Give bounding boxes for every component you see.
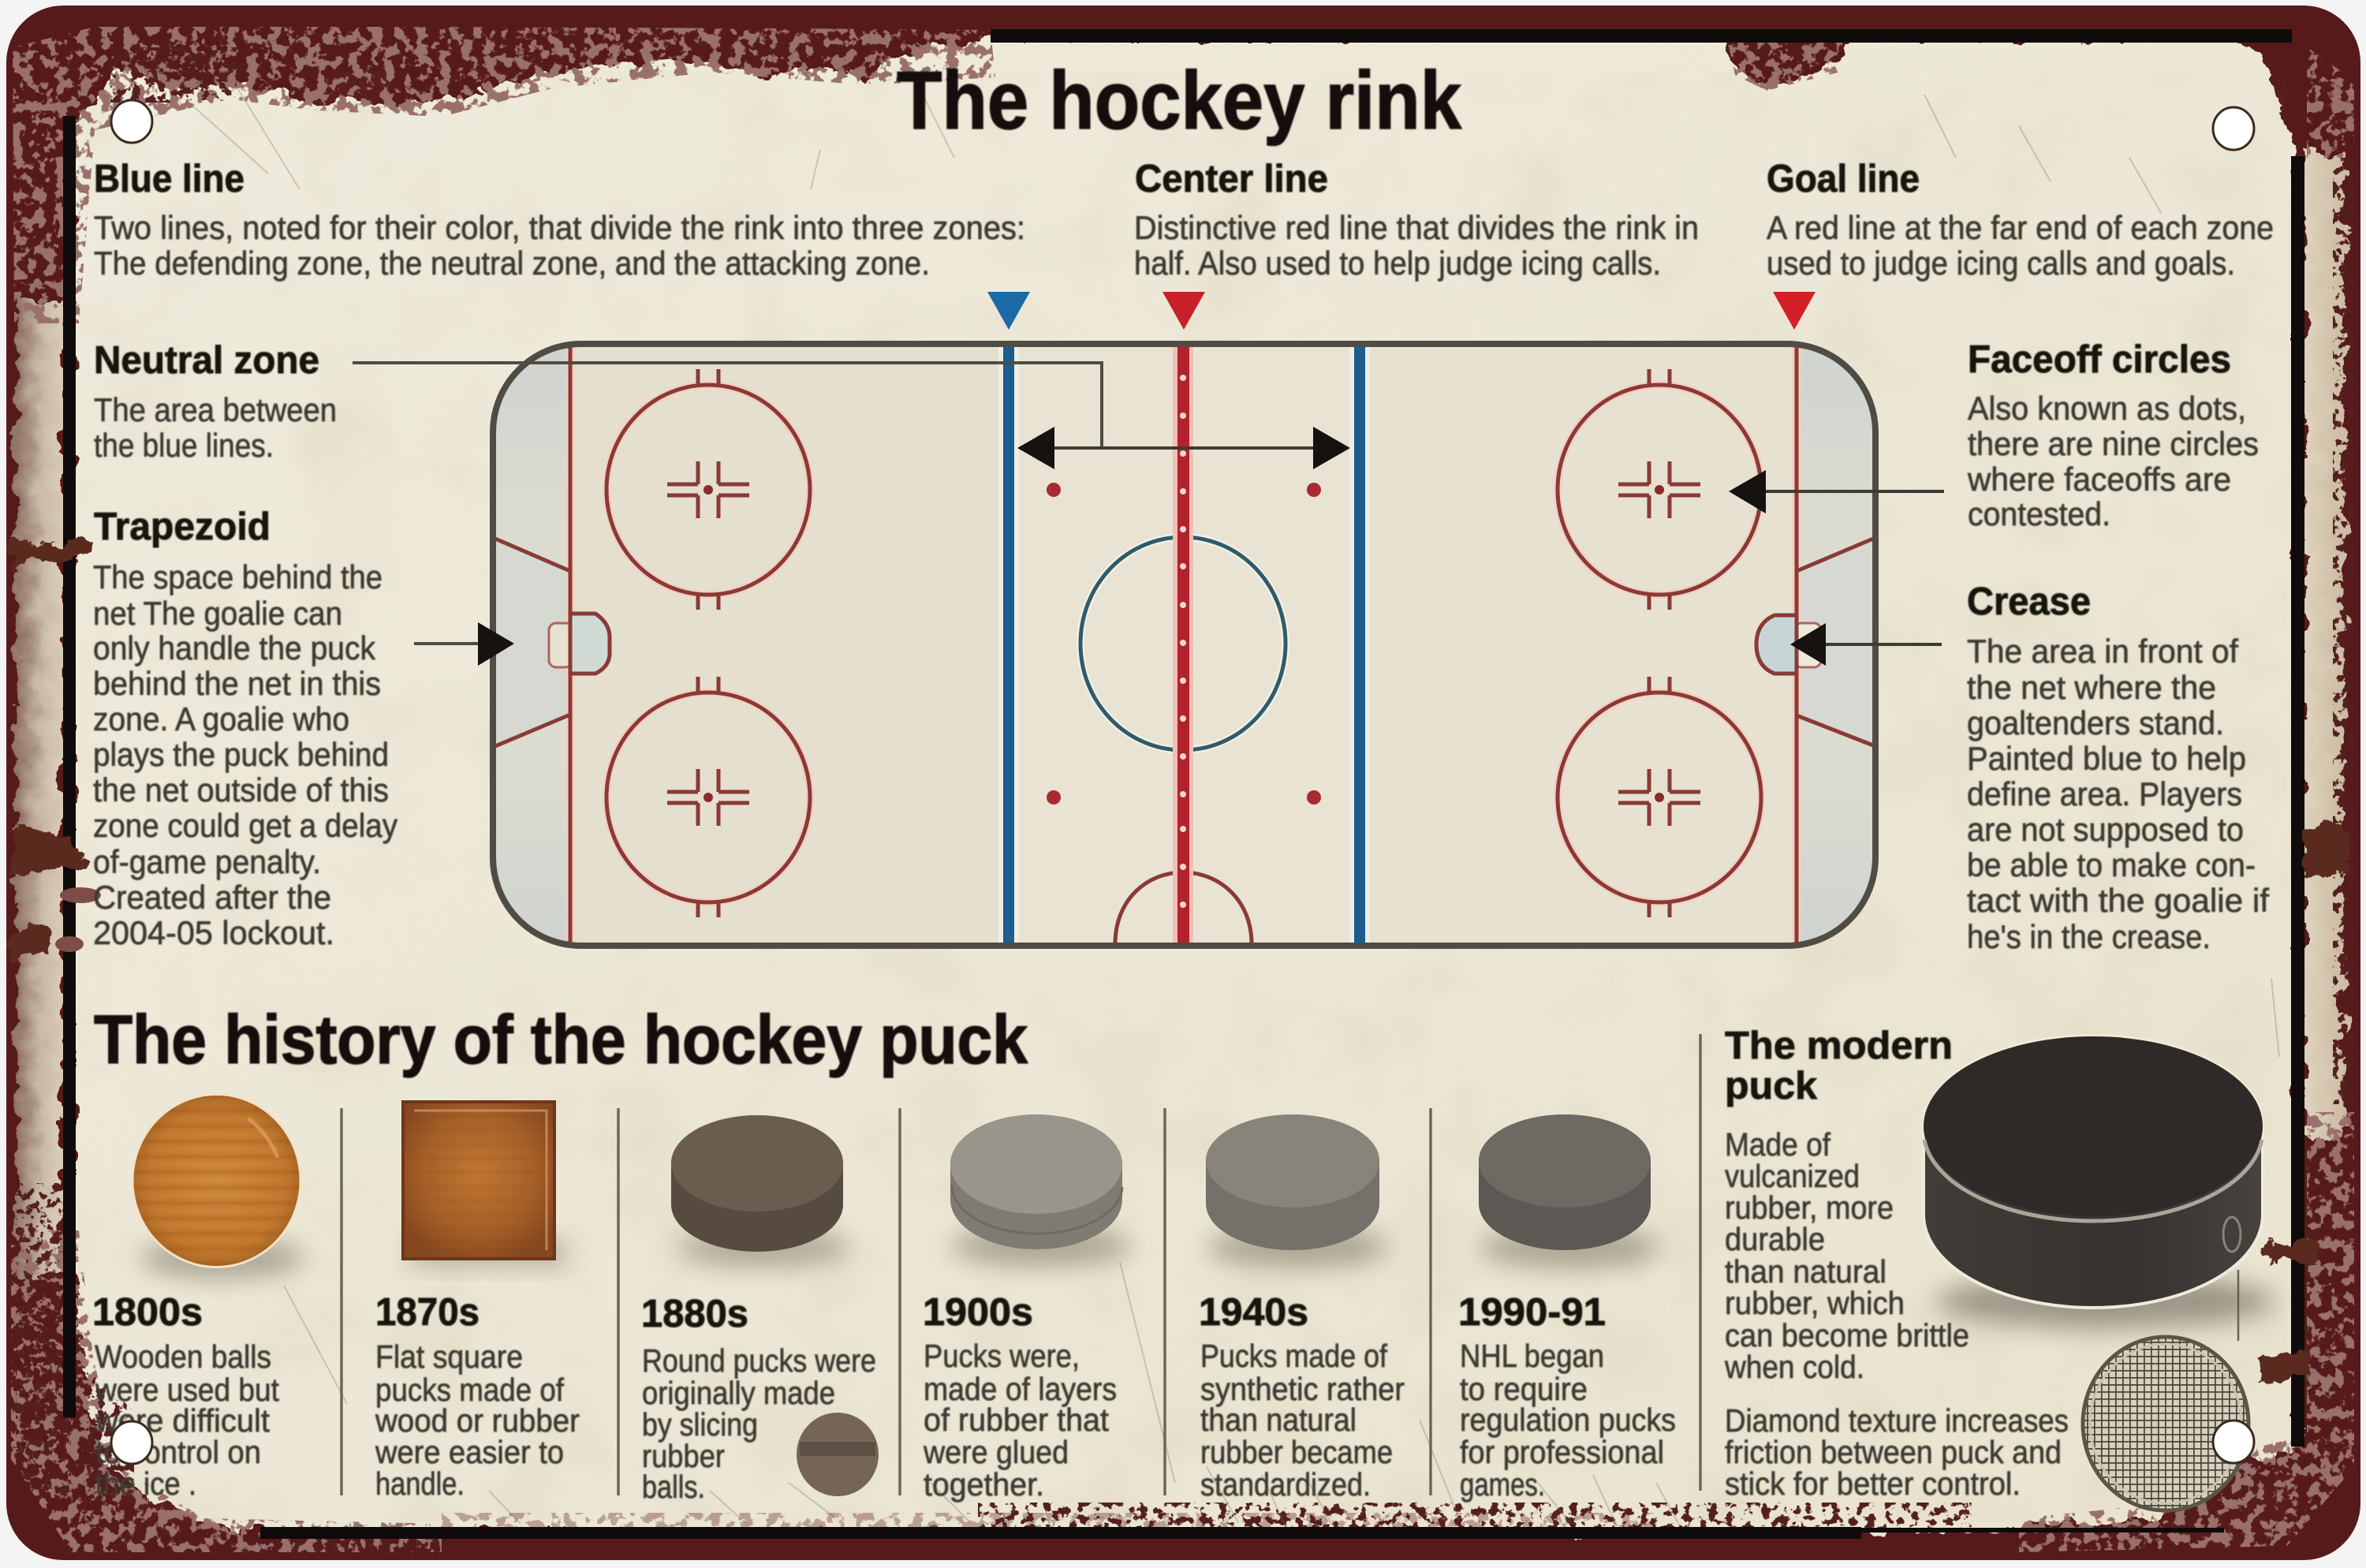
text block: modern puck description <box>1724 1126 1969 1385</box>
text block: 1940s: 1940s <box>1199 1291 1308 1334</box>
text block: modern puck heading: The modern <box>1725 1025 1953 1067</box>
text block: blue line: Blue line <box>94 158 244 200</box>
text block: 1870s: were easier to <box>375 1434 564 1470</box>
text block: 1940s: Pucks made of <box>1200 1338 1388 1374</box>
center red line <box>1173 345 1193 944</box>
text block: center line: half. Also used to help judge icing calls. <box>1134 245 1661 282</box>
icon: sliced rubber ball <box>797 1413 879 1496</box>
text block: 1900s: Pucks were, <box>924 1338 1080 1374</box>
text block: 1940s: synthetic rather <box>1200 1371 1405 1407</box>
chart: rink diagram <box>493 344 1875 946</box>
text block: center line: Center line <box>1135 158 1328 200</box>
arrow: goal line marker <box>1773 292 1816 330</box>
text block: crease: be able to make con- <box>1967 846 2256 883</box>
text block: modern puck description: vulcanized <box>1725 1158 1860 1194</box>
text block: 1900s: of rubber that <box>924 1402 1110 1438</box>
text block: 1870s: Flat square <box>375 1338 523 1375</box>
text block: neutral zone: Neutral zone <box>94 339 319 382</box>
text block: crease: The area in front of <box>1967 633 2238 670</box>
text block: 1880s: balls. <box>642 1469 705 1505</box>
text block: faceoff circles: where faceoffs are <box>1967 461 2231 498</box>
thin leader to texture detail <box>2237 1270 2239 1341</box>
text block: neutral zone <box>94 339 337 464</box>
faceoff circle: bottom left <box>606 677 810 917</box>
text block: 1990-91: games. <box>1460 1466 1545 1503</box>
text block: trapezoid: The space behind the <box>93 558 383 595</box>
text block: 1870s: 1870s <box>375 1291 480 1334</box>
text block: 1800s: the ice . <box>95 1465 196 1502</box>
text block: trapezoid: zone could get a delay <box>93 807 397 844</box>
text block: 1990-91: for professional <box>1460 1434 1664 1470</box>
text block: trapezoid <box>93 506 397 951</box>
text block: center line <box>1134 158 1699 282</box>
text block: 1800s: to control on <box>95 1434 261 1470</box>
text block: modern puck description: than natural <box>1725 1253 1886 1290</box>
text block: 1990-91: 1990-91 <box>1458 1291 1606 1334</box>
text block: modern puck description: rubber, more <box>1725 1189 1894 1226</box>
text block: trapezoid: the net outside of this <box>93 771 389 808</box>
icon: 1940s synthetic puck <box>1206 1114 1388 1268</box>
icon: 1990-91 regulation puck <box>1479 1114 1660 1268</box>
divider <box>1699 1034 1702 1491</box>
text block: 1900s: together. <box>924 1466 1044 1503</box>
icon: modern black puck <box>1924 1036 2275 1328</box>
text block: 1880s: rubber <box>642 1438 725 1474</box>
paint chips near left frame <box>55 887 101 952</box>
text block: 1880s: 1880s <box>641 1293 748 1335</box>
text block: 1990-91: regulation pucks <box>1460 1402 1676 1438</box>
text block: trapezoid: Trapezoid <box>94 506 271 548</box>
panel: the modern puck <box>1700 1025 2275 1510</box>
arrow: faceoff circles leader <box>1729 470 1944 513</box>
text block: 1800s: were used but <box>95 1372 280 1408</box>
text block: crease: are not supposed to <box>1967 811 2244 848</box>
text block: 1880s: by slicing <box>642 1406 758 1443</box>
text block: neutral zone: the blue lines. <box>94 427 274 464</box>
text block: modern puck description: durable <box>1725 1221 1825 1257</box>
text block: goal line: Goal line <box>1767 158 1920 200</box>
text block: faceoff circles <box>1967 338 2259 532</box>
faceoff circle: bottom right <box>1558 677 1761 917</box>
text block: 1900s <box>923 1291 1117 1503</box>
icon: diamond texture detail <box>2083 1337 2248 1510</box>
heading: history of the hockey puck: The history of the hockey puck <box>94 1002 1028 1078</box>
text block: faceoff circles: Also known as dots, <box>1968 390 2246 427</box>
text block: 1800s: were difficult <box>95 1402 271 1439</box>
text block: 1870s: pucks made of <box>375 1372 565 1408</box>
arrow: crease leader <box>1790 623 1942 666</box>
neutral zone dots <box>1047 483 1321 805</box>
text block: diamond texture <box>1725 1402 2069 1502</box>
text block: diamond texture: stick for better control. <box>1725 1465 2021 1502</box>
text block: 1900s: made of layers <box>924 1371 1117 1407</box>
text block: 1870s: wood or rubber <box>375 1402 580 1439</box>
column dividers <box>341 1108 1431 1495</box>
text block: 1990-91: NHL began <box>1460 1338 1604 1374</box>
text block: diamond texture: friction between puck and <box>1725 1434 2062 1470</box>
panel: right worn strip <box>2303 154 2344 1136</box>
text block: 1940s: rubber became <box>1200 1434 1393 1470</box>
text block: 1800s: 1800s <box>92 1291 203 1334</box>
icon: 1800s wooden ball <box>131 1093 305 1279</box>
text block: blue line <box>94 158 1025 282</box>
panel: left worn strip <box>16 300 63 1278</box>
text block: trapezoid: only handle the puck <box>93 629 376 666</box>
text block: modern puck description: when cold. <box>1724 1349 1864 1385</box>
arrow: center line marker <box>1162 292 1205 330</box>
title: The hockey rink <box>897 55 1461 147</box>
text block: modern puck heading: puck <box>1725 1065 1818 1107</box>
center circle <box>1080 537 1286 750</box>
text block: blue line: Two lines, noted for their color, that divide the rink into three zones: <box>94 209 1025 246</box>
text block: goal line: A red line at the far end of each zone <box>1767 209 2274 246</box>
text block: 1990-91 <box>1458 1291 1676 1503</box>
text block: trapezoid: net The goalie can <box>93 595 342 632</box>
text block: trapezoid: behind the net in this <box>93 665 381 702</box>
faceoff circle: top left <box>606 369 810 610</box>
text block: modern puck description: Made of <box>1725 1126 1831 1163</box>
text block: trapezoid: of-game penalty. <box>93 843 321 880</box>
icon: 1900s layered puck <box>950 1114 1132 1267</box>
text block: diamond texture: Diamond texture increases <box>1725 1402 2069 1439</box>
text block: neutral zone: The area between <box>94 391 337 428</box>
text block: 1940s: standardized. <box>1200 1466 1371 1503</box>
text block: crease: tact with the goalie if <box>1967 882 2269 919</box>
text block: trapezoid: zone. A goalie who <box>93 700 349 737</box>
icon: 1870s flat square puck <box>403 1102 564 1265</box>
text block: crease: he's in the crease. <box>1967 918 2211 955</box>
rink boards outline <box>493 344 1875 946</box>
text block: goal line <box>1767 158 2274 282</box>
text block: trapezoid: Created after the <box>93 879 331 916</box>
blue lines <box>998 345 1370 944</box>
arrow: trapezoid leader <box>414 622 514 666</box>
text block: center line: Distinctive red line that divides the rink in <box>1134 209 1699 246</box>
text block: 1880s: originally made <box>642 1375 835 1411</box>
text block: 1870s: handle. <box>375 1465 465 1502</box>
text block: modern puck heading <box>1725 1025 1953 1107</box>
text block: faceoff circles: contested. <box>1968 495 2110 532</box>
text block: modern puck description: rubber, which <box>1725 1285 1905 1321</box>
text block: 1870s <box>375 1291 580 1502</box>
text block: crease: the net where the <box>1967 669 2216 706</box>
text block: 1800s <box>92 1291 280 1502</box>
text block: 1940s: than natural <box>1200 1402 1357 1438</box>
rust blots on frame <box>8 540 2346 1384</box>
text block: 1800s: Wooden balls <box>95 1338 271 1375</box>
text block: 1990-91: to require <box>1460 1371 1588 1407</box>
text block: crease: Crease <box>1967 581 2091 623</box>
text block: crease: define area. Players <box>1967 775 2242 812</box>
left crease and net <box>549 614 610 674</box>
text block: faceoff circles: there are nine circles <box>1968 425 2259 462</box>
mounting holes <box>111 100 2254 1464</box>
text block: 1880s: Round pucks were <box>642 1342 876 1379</box>
faceoff circle: top right <box>1558 369 1761 610</box>
text block: faceoff circles: Faceoff circles <box>1968 338 2231 381</box>
arrow: blue line marker <box>987 292 1030 330</box>
text block: modern puck description: can become brittle <box>1725 1317 1969 1353</box>
text block: blue line: The defending zone, the neutral zone, and the attacking zone. <box>94 245 930 282</box>
right crease and net <box>1756 615 1821 674</box>
text block: trapezoid: 2004-05 lockout. <box>93 914 334 951</box>
icon: 1880s round puck <box>671 1115 852 1268</box>
goal lines <box>495 345 1873 944</box>
text block: crease: Painted blue to help <box>1967 740 2246 777</box>
rink ice surface <box>493 344 1875 946</box>
text block: 1900s: were glued <box>923 1434 1069 1470</box>
text block: 1940s <box>1199 1291 1405 1503</box>
text block: crease <box>1967 581 2269 955</box>
text block: crease: goaltenders stand. <box>1967 704 2224 741</box>
arrow: neutral zone leader <box>353 363 1350 469</box>
text block: trapezoid: plays the puck behind <box>93 736 389 773</box>
text block: 1900s: 1900s <box>923 1291 1033 1334</box>
referee crease arc <box>1115 872 1252 944</box>
text block: 1880s <box>641 1293 876 1505</box>
text block: goal line: used to judge icing calls and goals. <box>1767 245 2235 282</box>
